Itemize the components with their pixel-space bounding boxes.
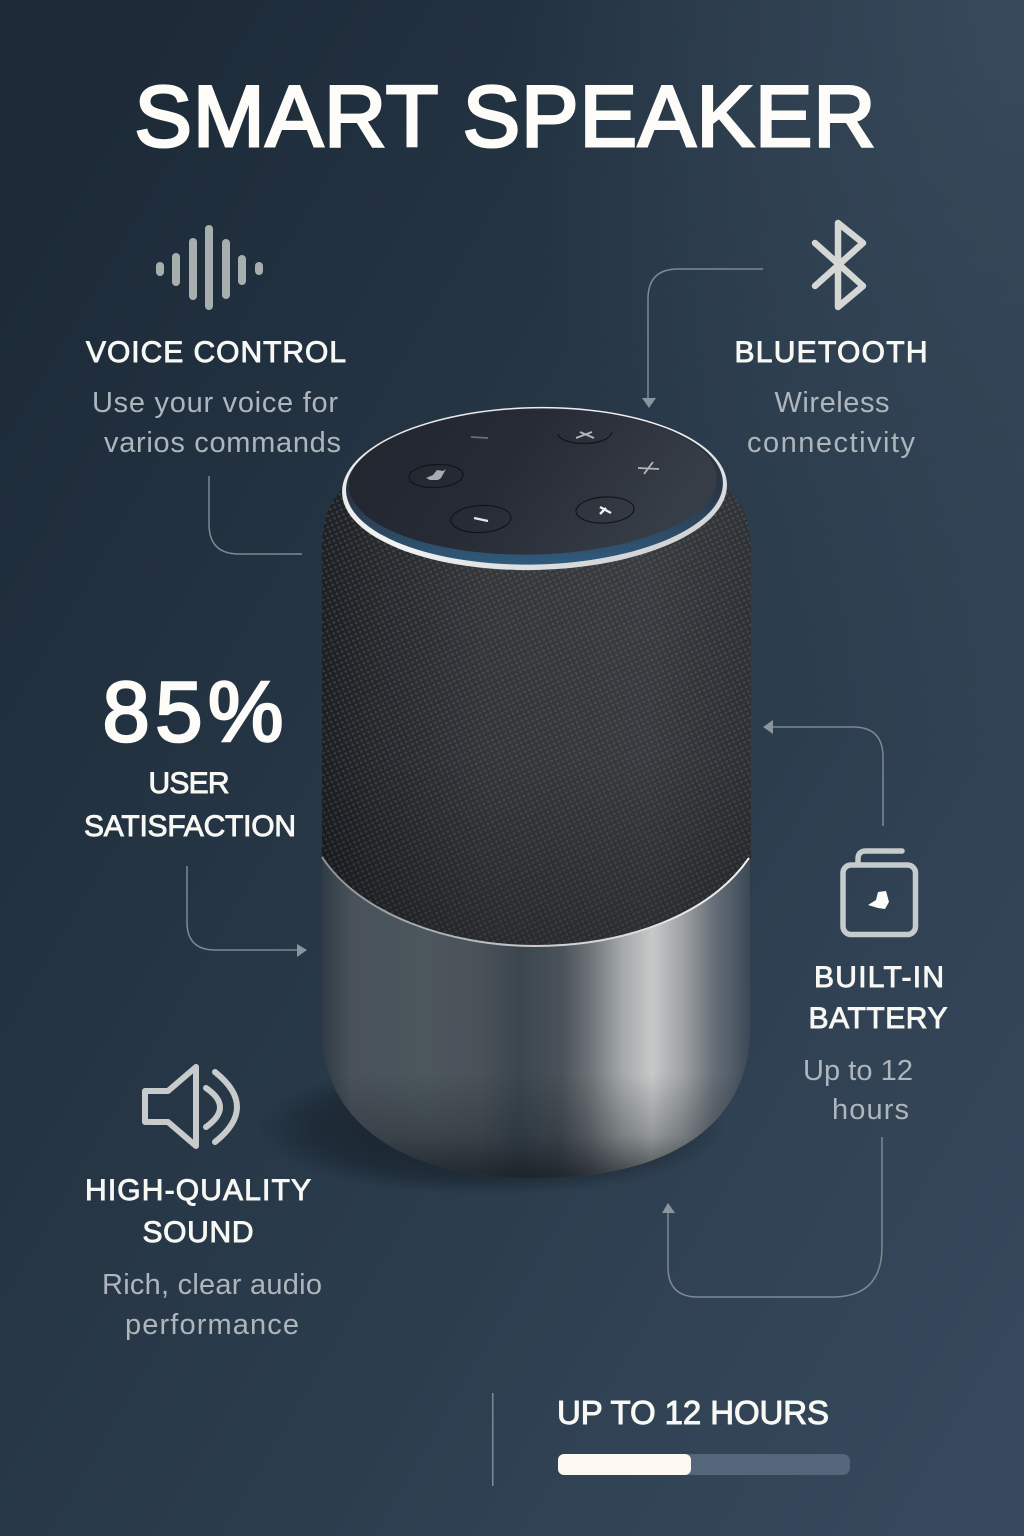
stat: 85% user satisfaction [84,665,296,843]
connector: battery to speaker [763,720,883,826]
description: voice control: varios commands [104,427,341,459]
description: bluetooth: Wireless [774,387,890,419]
floor shadow [255,1060,725,1196]
button glyphs [471,432,659,521]
heading: high-quality sound: SOUND [142,1216,254,1249]
fabric shading [322,475,751,946]
heading: high-quality sound [85,1174,311,1249]
metal base shading [322,850,750,1178]
description: sound [102,1269,322,1341]
title: SMART SPEAKER [134,69,876,165]
description: battery [803,1055,913,1126]
top buttons [408,432,635,534]
divider line [492,1393,494,1486]
heading: bluetooth: BLUETOOTH [734,336,928,369]
connector: satisfaction to speaker [187,866,307,957]
description: bluetooth: connectivity [747,427,916,459]
fabric weave [322,475,751,946]
icon: mute button glyph [426,469,446,480]
stat number: 85% [102,665,284,760]
heading: built-in battery [808,961,948,1035]
fabric body [322,475,751,946]
blue light ring [344,405,725,568]
icon: voice waveform [156,225,263,310]
description: sound: Rich, clear audio [102,1269,322,1301]
connector: bluetooth to speaker [642,269,763,408]
top cap [340,403,729,574]
stat label: SATISFACTION [84,810,296,843]
metal ring [340,403,729,574]
top surface [347,406,718,558]
description: voice control [92,387,341,459]
heading: built-in battery: BATTERY [808,1002,948,1035]
metal rim highlight [322,857,749,946]
connector: voice control to speaker [209,476,302,554]
high-quality sound text [85,1174,322,1341]
bluetooth text [734,336,928,459]
metal base [322,850,750,1178]
description: bluetooth [747,387,916,459]
connector: battery to base [662,1137,882,1297]
heading: voice control: VOICE CONTROL [86,336,346,369]
icon: bluetooth [815,223,863,307]
heading: high-quality sound: HIGH-QUALITY [85,1174,311,1207]
heading: built-in battery: BUILT-IN [814,961,944,994]
icon: speaker sound [145,1067,237,1146]
voice control text [86,336,346,459]
description: sound: performance [125,1309,299,1341]
battery text [803,961,948,1126]
stat label [84,767,296,843]
battery life meter [557,1394,850,1475]
stat label: USER [148,767,230,800]
description: voice control: Use your voice for [92,387,338,419]
description: battery: hours [832,1094,909,1126]
description: battery: Up to 12 [803,1055,913,1087]
meter fill [558,1454,691,1475]
meter track [558,1454,850,1475]
speaker [255,403,751,1196]
meter label: UP TO 12 HOURS [557,1394,829,1431]
icon: battery [843,851,916,934]
